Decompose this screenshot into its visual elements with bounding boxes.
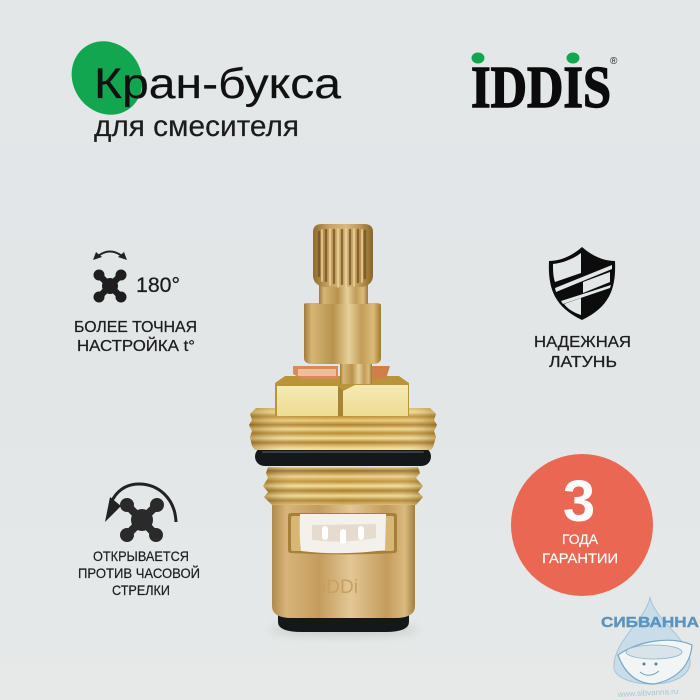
cylindrical body bbox=[272, 503, 415, 618]
label: 180 degrees: 180° bbox=[136, 274, 180, 297]
warranty text: ГАРАНТИИ bbox=[542, 550, 618, 566]
black o-ring bbox=[255, 447, 431, 466]
watermark: Sibvanna: www.sibvanna.ru bbox=[617, 687, 679, 699]
label: more precise temperature setting: НАСТРОЙКА t° bbox=[77, 336, 195, 355]
label: reliable brass: ЛАТУНЬ bbox=[549, 354, 617, 371]
label: opens counter-clockwise: ОТКРЫВАЕТСЯ bbox=[93, 548, 189, 564]
copper washer bbox=[293, 366, 338, 379]
lower thread bbox=[263, 467, 423, 505]
neck under collar bbox=[340, 362, 372, 384]
warranty number: 3 bbox=[563, 469, 595, 534]
shadow bbox=[269, 625, 419, 635]
icon: rotate 180 bbox=[93, 252, 127, 302]
icon: shield bbox=[549, 247, 615, 320]
label: reliable brass: НАДЕЖНАЯ bbox=[534, 334, 631, 351]
product: brass cartridge bbox=[249, 224, 437, 635]
label: more precise temperature setting bbox=[74, 319, 197, 355]
label: reliable brass bbox=[534, 334, 631, 371]
watermark: Sibvanna bbox=[601, 597, 699, 699]
knurled stem bbox=[313, 224, 373, 287]
icon: counter-clockwise opening bbox=[105, 484, 176, 542]
upper thread bbox=[249, 408, 437, 450]
logo: IDDIS: IDDIS bbox=[471, 54, 611, 120]
stem neck bbox=[319, 282, 368, 304]
warranty badge bbox=[511, 454, 653, 596]
white insert bbox=[300, 514, 386, 553]
label: more precise temperature setting: БОЛЕЕ ТОЧНАЯ bbox=[74, 319, 197, 336]
watermark: Sibvanna: СИБВАННА bbox=[601, 614, 699, 631]
label: opens counter-clockwise: СТРЕЛКИ bbox=[112, 582, 170, 598]
label: opens counter-clockwise: ПРОТИВ ЧАСОВОЙ bbox=[78, 564, 200, 581]
subtitle: для смесителя bbox=[94, 110, 299, 143]
warranty text: ГОДА bbox=[562, 531, 599, 547]
title: Кран-букса bbox=[94, 60, 341, 108]
engraved mark: iDDi bbox=[322, 577, 358, 598]
collar bbox=[304, 303, 381, 364]
green blob accent bbox=[57, 27, 157, 129]
warranty text bbox=[542, 531, 618, 566]
bottom black seal bbox=[278, 612, 409, 632]
logo dot bbox=[472, 52, 484, 64]
label: opens counter-clockwise bbox=[78, 548, 200, 598]
hexagonal nut bbox=[275, 376, 409, 416]
window frame bbox=[288, 513, 397, 554]
logo: IDDIS: ® bbox=[610, 56, 618, 67]
